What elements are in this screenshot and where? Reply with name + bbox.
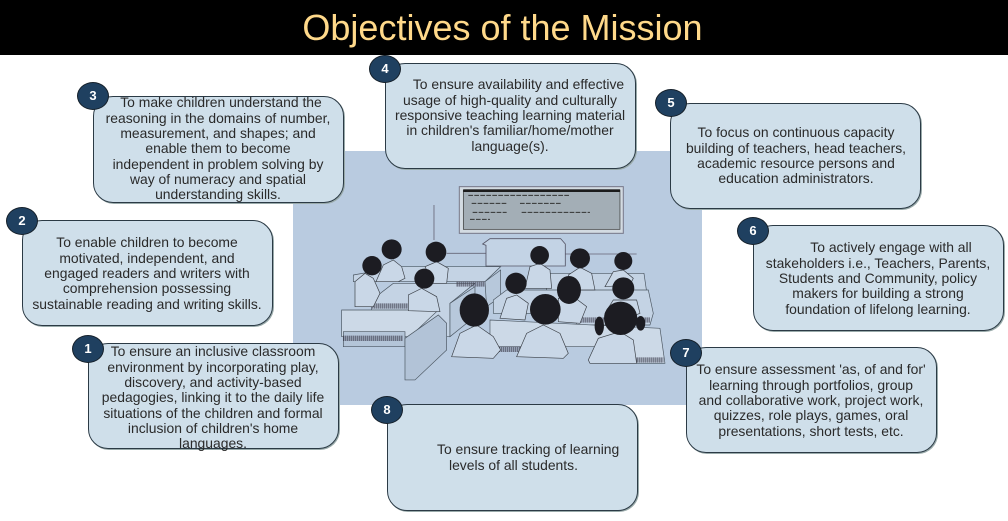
text: objective 2: To enable children to become [56,234,238,250]
text: objective 4: To ensure availability and effective [413,76,624,92]
blackboard [459,187,623,233]
text: objective 5: education administrators. [718,170,874,186]
text: objective 3: measurement, and shapes; and [120,125,316,141]
text: objective 6: foundation of lifelong learning. [785,301,971,317]
text: objective 1: languages. [179,435,247,451]
badge 8 [371,396,403,424]
text: objective 1: situations of the children and formal [103,405,323,421]
title: Objectives of the Mission [302,7,703,48]
panel: objective 2 [22,220,273,326]
text: objective 8 [437,441,619,473]
panel: objective 4 [385,63,636,169]
badge 7 [670,339,702,367]
panel: objective 1 [88,343,339,449]
text: objective 7: quizzes, role plays, games, oral [714,407,908,423]
text: objective 3: reasoning in the domains of number, [106,110,330,126]
text: objective 2: engaged readers and writers with [44,265,250,281]
text: objective 6: makers for building a strong [792,285,964,301]
text: objective 4: in children's familiar/home/mother [406,122,614,138]
text: objective 2: motivated, independent, and [59,250,235,266]
panel: objective 6 [753,225,1004,331]
badge 2 [6,207,38,235]
text: objective 6: Students and Community, policy [779,270,977,286]
badge 3 [77,82,109,110]
text: objective 4: usage of high-quality and culturally [403,92,617,108]
desks [342,267,665,380]
badge 3: 3 [89,88,97,103]
text: objective 3: To make children understand the [120,94,322,110]
text: objective 1: pedagogies, linking it to the daily life [102,389,324,405]
text: objective 8: To ensure tracking of learning [437,441,619,457]
classroom illustration [293,151,702,405]
text: objective 7: and collaborative work, project work, [699,392,923,408]
badge 5 [655,89,687,117]
text: objective 7: To ensure assessment 'as, of and for' [696,361,926,377]
text: objective 2: comprehension possessing [63,280,231,296]
back wall line and teacher desk [434,205,637,254]
panel: objective 8 [387,404,638,511]
text: objective 6: To actively engage with all [810,239,972,255]
badge 6 [737,217,769,245]
text: objective 4 [395,76,625,154]
text: objective 2 [32,234,262,312]
panel: objective 3 [93,96,344,203]
badge 5: 5 [667,95,675,110]
text: objective 6 [766,239,990,317]
text: objective 1: environment by incorporating play, [107,359,319,375]
badge 8: 8 [383,402,391,417]
badge 4 [369,55,401,83]
panel: objective 5 [670,103,921,209]
text: objective 7 [696,361,926,439]
badge 1 [72,335,104,363]
text: objective 1: discovery, and activity-based [124,374,302,390]
text: objective 8: levels of all students. [449,457,578,473]
text: objective 1: inclusion of children's home [128,420,298,436]
text: objective 7: presentations, short tests, etc. [718,423,904,439]
badge 1: 1 [84,341,92,356]
text: objective 3: independent in problem solving by [113,156,323,172]
students [355,260,640,363]
text: objective 4: language(s). [471,138,549,154]
text: objective 5: building of teachers, head teachers, [686,140,906,156]
panel: objective 7 [686,347,937,453]
badge 2: 2 [18,213,26,228]
text: objective 3: understanding skills. [155,186,281,202]
text: objective 1: To ensure an inclusive classroom [111,343,315,359]
text: objective 5: academic resource persons and [697,155,895,171]
text: objective 3: way of numeracy and spatial [130,171,306,187]
title bar [0,0,1008,55]
text: objective 3: enable them to become [145,140,291,156]
text: objective 4: responsive teaching learning material [395,107,625,123]
text: objective 6: stakeholders i.e., Teachers, Parents, [766,255,990,271]
badge 6: 6 [749,223,757,238]
text: objective 2: sustainable reading and writing skills. [32,296,262,312]
text: objective 3 [106,94,330,202]
text: objective 7: learning through portfolios, group [709,377,913,393]
text: objective 5: To focus on continuous capacity [698,124,894,140]
badge 4: 4 [381,61,389,76]
badge 7: 7 [682,345,690,360]
text: objective 1 [102,343,324,451]
text: objective 5 [686,124,906,186]
